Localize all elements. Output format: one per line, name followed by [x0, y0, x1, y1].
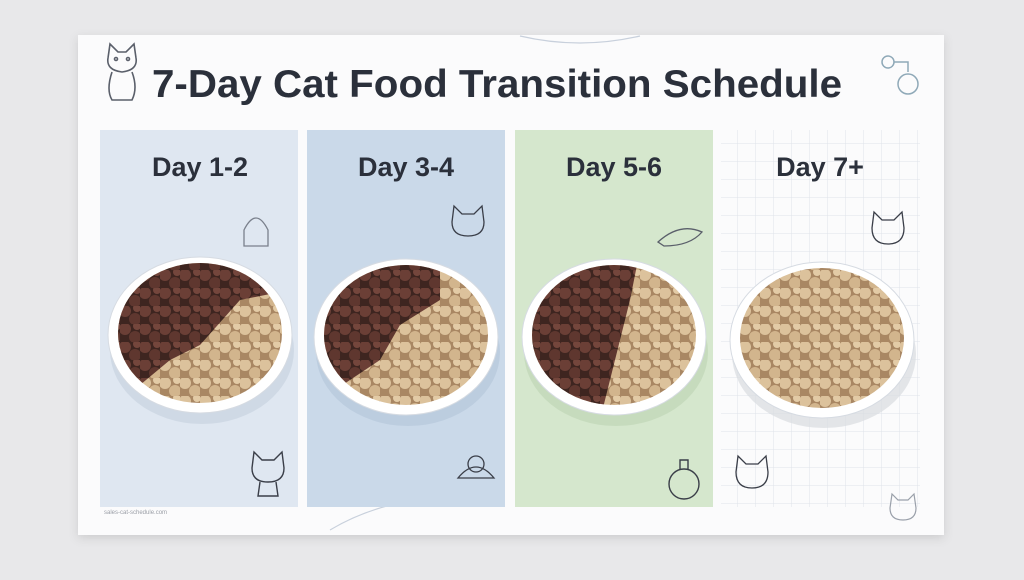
- panel: day 7+: [720, 130, 930, 520]
- panel: day 3-4: Day 3-4: [358, 152, 454, 182]
- icon: cat top-left: [108, 44, 136, 100]
- panel: day 1-2: sales-cat-schedule.com: [104, 510, 167, 516]
- panel: day 1-2: [100, 130, 300, 516]
- card: [78, 35, 944, 535]
- panel: day 5-6: Day 5-6: [566, 152, 662, 182]
- panel: day 3-4: [300, 130, 510, 507]
- panel: day 7+: Day 7+: [776, 152, 864, 182]
- panel: day 5-6: [515, 130, 720, 507]
- panel: day 1-2: Day 1-2: [152, 152, 248, 182]
- icon: toy top-right: [882, 56, 918, 94]
- title: 7-Day Cat Food Transition Schedule: [152, 63, 842, 106]
